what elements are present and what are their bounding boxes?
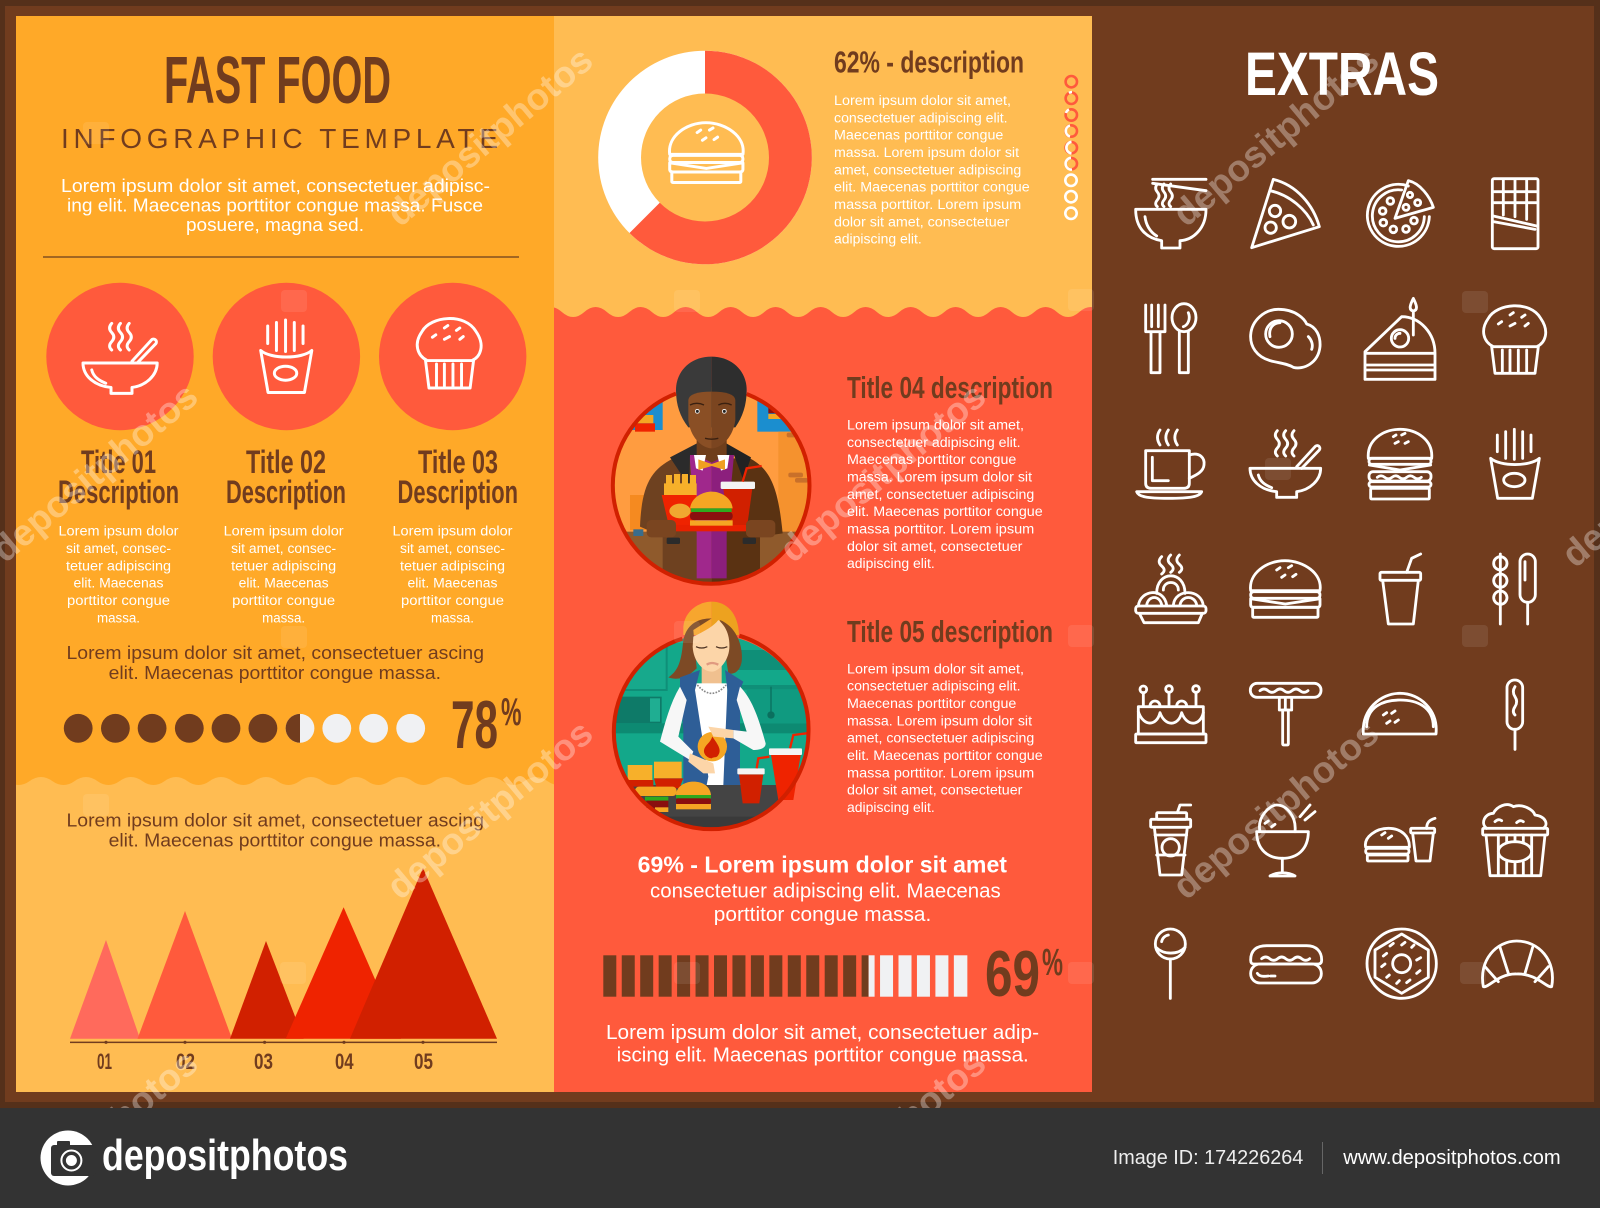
icon: burger in donut xyxy=(669,123,743,183)
icon: ice cream sundae xyxy=(1257,805,1315,876)
stat: 78 percent: % xyxy=(501,691,522,734)
text block: title 04: consectetuer adipiscing elit. xyxy=(847,435,1021,450)
icon: muffin xyxy=(1484,306,1546,373)
watermark overlays: depositphotos xyxy=(379,39,600,234)
text block: title 05: massa. Lorem ipsum dolor sit xyxy=(847,713,1032,728)
text block: title 05: consectetuer adipiscing elit. xyxy=(847,679,1021,694)
chart axis labels: 05 xyxy=(414,1049,433,1074)
column 1 text: porttitor congue xyxy=(67,593,170,608)
text block: title 05: adipiscing elit. xyxy=(847,800,935,815)
heading: title 04: Title 04 description xyxy=(847,370,1053,405)
text block: 62 percent: massa porttitor. Lorem ipsum xyxy=(834,197,1021,212)
subtitle: INFOGRAPHIC TEMPLATE xyxy=(61,123,498,154)
column 3 text: porttitor congue xyxy=(401,593,504,608)
watermark camera marks xyxy=(83,122,1488,984)
icon: popcorn xyxy=(1483,805,1548,876)
panel: middle column with donut and red section xyxy=(539,16,1124,1100)
footer bar xyxy=(0,1108,1600,1208)
ring meter xyxy=(1065,76,1077,219)
text block: title 04 xyxy=(847,418,1043,571)
icon: noodle bowl xyxy=(1136,179,1206,248)
watermark overlays: depositphotos xyxy=(1165,712,1386,907)
heading: 62 percent description: 62% - description xyxy=(834,45,1024,80)
text block: 62 percent: consectetuer adipiscing elit. xyxy=(834,110,1008,125)
text block: title 04: massa. Lorem ipsum dolor sit xyxy=(847,470,1032,484)
circle icon 3: muffin xyxy=(379,283,526,430)
text block: title 04: elit. Maecenas porttitor congue xyxy=(847,504,1043,519)
intro text block: Lorem ipsum dolor sit amet, consectetuer adipisc- xyxy=(61,176,490,196)
icon: sausage on fork xyxy=(1250,683,1321,745)
stat: 69 percent: % xyxy=(1042,942,1063,984)
footer logo wordmark: depositphotos xyxy=(102,1131,348,1180)
column 3 text xyxy=(392,524,513,625)
column 2 text: sit amet, consec- xyxy=(231,541,336,556)
text block above dot meter: elit. Maecenas porttitor congue massa. xyxy=(109,663,441,683)
text block: title 04: Maecenas porttitor congue xyxy=(847,452,1016,467)
column 1 text: sit amet, consec- xyxy=(66,541,171,556)
column 1 text: elit. Maecenas xyxy=(74,576,164,591)
icon: coffee to go xyxy=(1151,805,1191,875)
column 1 text: massa. xyxy=(97,610,140,625)
text block: 62 percent: amet, consectetuer adipiscing xyxy=(834,162,1021,177)
watermark overlays: depositphotos xyxy=(379,712,600,907)
column 2 heading: Title 02 xyxy=(246,444,326,480)
bar meter 69 percent xyxy=(603,955,967,997)
intro text block: posuere, magna sed. xyxy=(186,215,364,235)
icon: soft drink xyxy=(1380,554,1421,624)
heading: extras: EXTRAS xyxy=(1245,40,1439,108)
icon: hot dog xyxy=(1251,946,1322,983)
column 1 text: tetuer adipiscing xyxy=(66,558,171,573)
text block: 69 percent: consectetuer adipiscing elit. Maecenas xyxy=(650,880,1001,902)
text block: 62 percent: elit. Maecenas porttitor congue xyxy=(834,180,1030,195)
column 1 heading xyxy=(58,444,179,510)
text block: title 05: Lorem ipsum dolor sit amet, xyxy=(847,661,1024,676)
icon: birthday cake xyxy=(1136,686,1206,743)
icon: whole pizza xyxy=(1367,181,1433,246)
stat: 78 percent: 78 xyxy=(451,687,498,763)
column 1 text xyxy=(58,524,179,625)
column 1 heading: Title 01 xyxy=(81,444,156,480)
icon: fork and spoon xyxy=(1146,304,1196,373)
text block: title 04: dolor sit amet, consectetuer xyxy=(847,539,1023,554)
text block: 69 percent: 69% - Lorem ipsum dolor sit amet xyxy=(638,852,1007,878)
text block above triangle chart: elit. Maecenas porttitor congue massa. xyxy=(109,831,441,851)
stat: 69 percent: 69 xyxy=(985,937,1040,1010)
triangle chart xyxy=(70,868,497,1074)
text block above triangle chart: Lorem ipsum dolor sit amet, consectetuer ascing xyxy=(66,811,484,831)
column 2 heading xyxy=(226,444,346,510)
column 3 heading: Description xyxy=(398,474,518,510)
column 2 text: tetuer adipiscing xyxy=(231,558,336,573)
text block: bottom of red section: Lorem ipsum dolor sit amet, consectetuer adip- xyxy=(606,1022,1039,1044)
text block above dot meter xyxy=(66,643,484,683)
icon: donut xyxy=(1367,929,1436,998)
heading: title 05: Title 05 description xyxy=(847,614,1053,649)
column 3 text: tetuer adipiscing xyxy=(400,558,505,573)
icon: cake slice xyxy=(1365,298,1435,379)
text block: 62 percent: Lorem ipsum dolor sit amet, xyxy=(834,93,1011,108)
chart axis labels: 02 xyxy=(176,1049,195,1074)
text block: title 05: amet, consectetuer adipiscing xyxy=(847,731,1034,746)
icon: fried egg xyxy=(1251,309,1320,368)
circle icon 2: fries xyxy=(213,283,360,430)
column 2 heading: Description xyxy=(226,474,346,510)
column 1 text: Lorem ipsum dolor xyxy=(58,524,179,539)
text block: title 04: Lorem ipsum dolor sit amet, xyxy=(847,418,1024,432)
column 2 text: Lorem ipsum dolor xyxy=(224,524,344,539)
watermark overlays: depositphotos xyxy=(1165,39,1386,234)
text block above dot meter: Lorem ipsum dolor sit amet, consectetuer ascing xyxy=(66,643,484,663)
dot meter 78 percent xyxy=(64,714,425,743)
icon: double burger xyxy=(1368,429,1432,499)
icon: burger xyxy=(1250,561,1320,617)
icon: taco xyxy=(1363,693,1436,734)
icon: chocolate bar xyxy=(1492,179,1538,249)
intro text block xyxy=(61,176,490,235)
icon: skewer and corn dog xyxy=(1494,554,1535,624)
illustration: woman with heartburn and fast food xyxy=(610,602,813,835)
title: FAST FOOD xyxy=(164,43,391,118)
text block: 62 percent: dolor sit amet, consectetuer xyxy=(834,214,1010,229)
column 2 text: porttitor congue xyxy=(232,593,335,608)
column 3 text: sit amet, consec- xyxy=(400,541,505,556)
column 3 text: Lorem ipsum dolor xyxy=(392,524,513,539)
icon: corn dog xyxy=(1507,680,1523,749)
text block above triangle chart xyxy=(66,811,484,851)
footer logo xyxy=(40,1130,348,1186)
icon: burger and drink xyxy=(1365,818,1435,861)
donut chart 62 percent xyxy=(598,51,812,264)
man figure xyxy=(640,357,783,583)
text block: title 05: massa porttitor. Lorem ipsum xyxy=(847,765,1034,780)
chart axis labels: 04 xyxy=(335,1049,354,1074)
chart axis labels: 01 xyxy=(97,1049,112,1074)
text block: 62 percent: massa. Lorem ipsum dolor sit xyxy=(834,145,1019,160)
column 2 text: massa. xyxy=(262,610,305,625)
text block: title 05 xyxy=(847,661,1043,815)
footer image id: Image ID: 174226264 xyxy=(1113,1147,1303,1169)
text block: title 05: dolor sit amet, consectetuer xyxy=(847,783,1023,798)
intro text block: ing elit. Maecenas porttitor congue massa. Fusce xyxy=(67,196,483,216)
illustration: man holding fast food tray xyxy=(610,357,813,585)
icon: pizza slice xyxy=(1252,179,1319,248)
icon: croissant xyxy=(1482,941,1552,987)
circle icon 1: soup bowl xyxy=(46,283,194,430)
icon: french fries xyxy=(1491,429,1539,498)
text block: 62 percent: Maecenas porttitor congue xyxy=(834,128,1003,143)
icon: spaghetti plate xyxy=(1136,555,1206,623)
text block: title 05: elit. Maecenas porttitor congue xyxy=(847,748,1043,763)
text block: title 04: amet, consectetuer adipiscing xyxy=(847,487,1034,502)
watermark overlays: depositphotos xyxy=(772,375,993,570)
icon grid: row 7 xyxy=(1155,929,1552,998)
icon: lollipop xyxy=(1155,929,1185,998)
column 1 heading: Description xyxy=(58,474,179,510)
icon grid: rows 4 to 6 xyxy=(1136,554,1548,876)
column 3 text: elit. Maecenas xyxy=(408,576,498,591)
icon: soup bowl xyxy=(1250,431,1321,497)
column 3 text: massa. xyxy=(431,610,474,625)
text block: bottom of red section xyxy=(606,1022,1039,1067)
column 3 heading xyxy=(398,444,518,510)
column 2 text: elit. Maecenas xyxy=(239,576,329,591)
panel: left orange column xyxy=(0,16,570,1100)
column 2 text xyxy=(224,524,344,625)
chart axis labels xyxy=(97,1049,433,1074)
text block: title 05: Maecenas porttitor congue xyxy=(847,696,1016,711)
text block: title 04: adipiscing elit. xyxy=(847,556,935,571)
icon: coffee cup xyxy=(1137,430,1204,498)
text block: bottom of red section: iscing elit. Maecenas porttitor congue massa. xyxy=(617,1045,1029,1067)
footer website: www.depositphotos.com xyxy=(1342,1147,1561,1169)
chart axis labels: 03 xyxy=(254,1049,273,1074)
text block: 69 percent: porttitor congue massa. xyxy=(714,904,931,926)
text block: 62 percent: adipiscing elit. xyxy=(834,232,922,247)
text block: 62 percent xyxy=(834,93,1030,247)
text block: 69 percent xyxy=(638,852,1007,926)
text block: title 04: massa porttitor. Lorem ipsum xyxy=(847,522,1034,536)
icon grid: rows 1 to 3 xyxy=(1136,179,1546,499)
column 3 heading: Title 03 xyxy=(418,444,498,480)
